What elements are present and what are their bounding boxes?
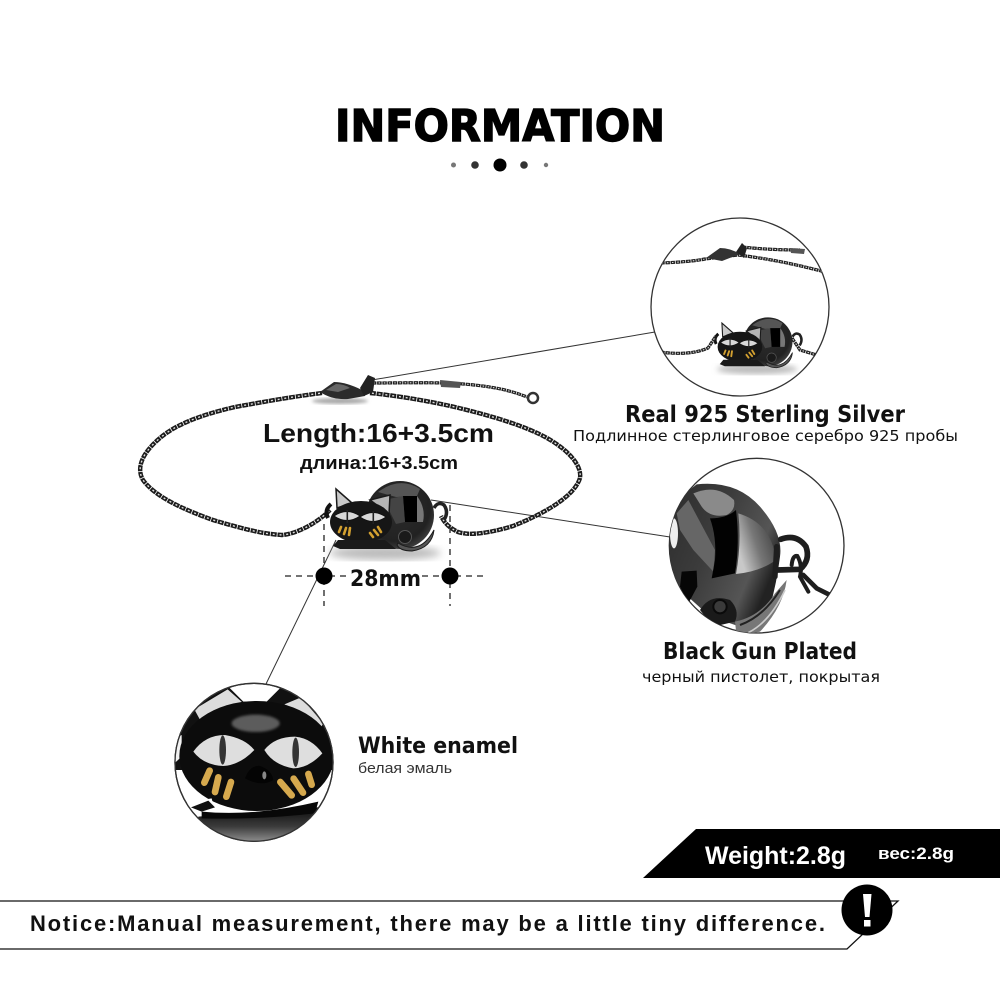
weight banner: вес:2.8g bbox=[878, 844, 954, 863]
notice box bbox=[0, 901, 898, 949]
icon: exclamation mark bbox=[842, 884, 892, 936]
heading: black gun plated: Black Gun Plated bbox=[663, 639, 857, 665]
28mm dimension: 28mm bbox=[350, 567, 421, 592]
panel: black gun plated detail circle bbox=[660, 458, 844, 637]
bracelet chain bbox=[140, 383, 580, 535]
title: INFORMATION bbox=[335, 101, 665, 152]
panel: white enamel detail circle bbox=[174, 680, 335, 847]
russian caption: plated: черный пистолет, покрытая bbox=[642, 668, 880, 686]
heading: white enamel: White enamel bbox=[358, 734, 518, 759]
28mm dimension bbox=[285, 505, 483, 606]
length labels: длина:16+3.5cm bbox=[300, 453, 458, 473]
length labels bbox=[263, 418, 494, 473]
notice box: Notice:Manual measurement, there may be a little tiny difference. bbox=[30, 911, 825, 936]
pendant: black cat bbox=[327, 481, 446, 560]
title dots ornament bbox=[451, 158, 548, 172]
length labels: Length:16+3.5cm bbox=[263, 418, 494, 448]
leader lines bbox=[266, 332, 670, 684]
panel: silver detail circle bbox=[651, 218, 829, 396]
heading: real 925 sterling silver: Real 925 Sterling Silver bbox=[625, 402, 906, 428]
weight banner bbox=[643, 829, 1000, 878]
weight banner: Weight:2.8g bbox=[705, 842, 846, 870]
russian caption: silver: Подлинное стерлинговое серебро 925 пробы bbox=[573, 427, 958, 445]
russian caption: enamel: белая эмаль bbox=[358, 760, 452, 777]
lobster clasp bbox=[312, 375, 461, 404]
